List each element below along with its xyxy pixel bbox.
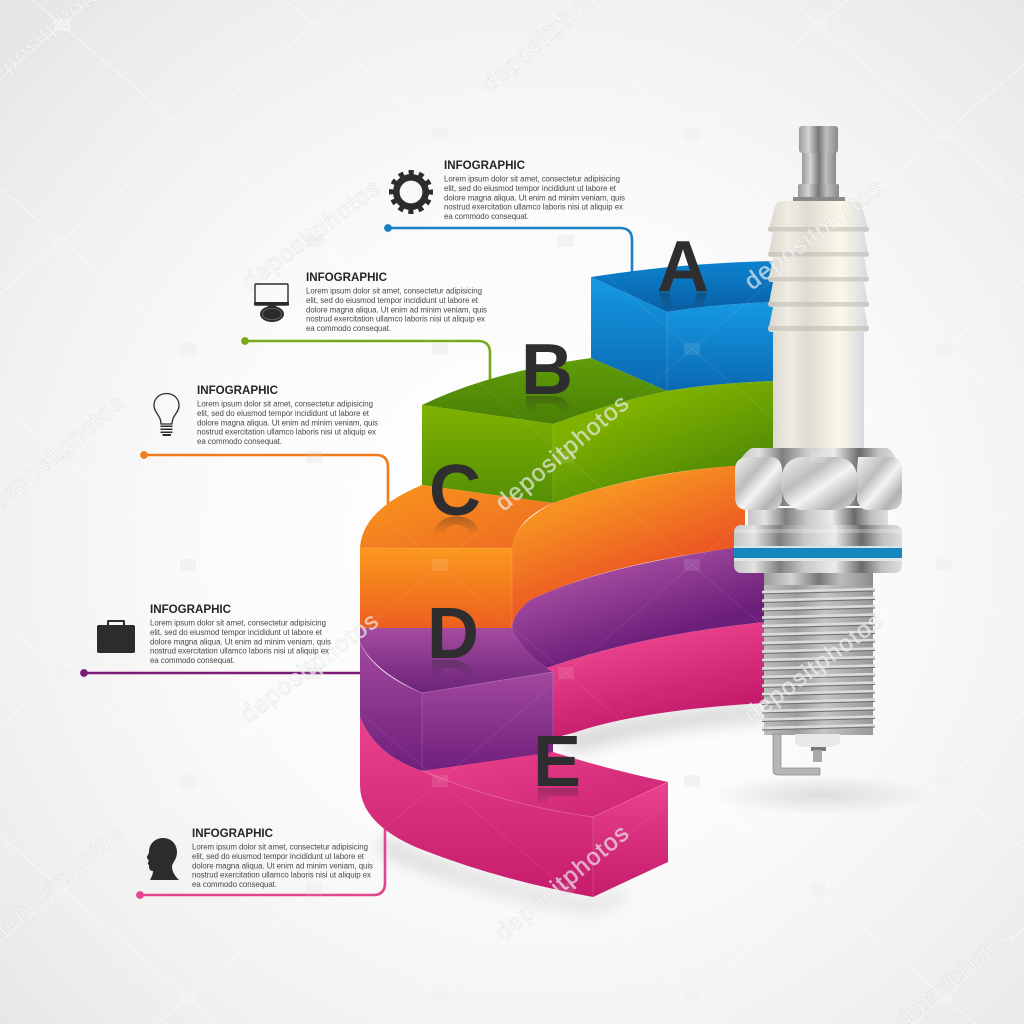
step D purple block: [360, 544, 765, 771]
icon: monitor: [254, 284, 289, 322]
block edge highlights: [360, 312, 668, 897]
text block D: nostrud exercitation ullamco laboris nisi ut aliquip ex: [150, 647, 329, 656]
text block E: INFOGRAPHIC: [192, 827, 274, 840]
plug hex nut and flange: [734, 448, 902, 573]
icon: gear: [392, 172, 430, 212]
letter A: A: [657, 227, 709, 307]
watermark overlay: depositphotos: [237, 175, 385, 295]
text block B: INFOGRAPHIC: [306, 271, 388, 284]
icon: person head: [147, 838, 179, 880]
text block A: dolore magna aliqua. Ut enim ad minim veniam, quis: [444, 193, 625, 202]
text block B: ea commodo consequat.: [306, 324, 391, 333]
text block B: elit, sed do eiusmod tempor incididunt ut labore et: [306, 296, 479, 305]
text block A: nostrud exercitation ullamco laboris nisi ut aliquip ex: [444, 203, 623, 212]
spark plug: [734, 126, 902, 775]
text block B: Lorem ipsum dolor sit amet, consectetur adipisicing: [306, 286, 482, 296]
text block C: [197, 384, 378, 446]
text block C: Lorem ipsum dolor sit amet, consectetur adipisicing: [197, 400, 373, 408]
connector line E: [137, 825, 385, 898]
letter D: [427, 594, 479, 724]
connector line B: [242, 338, 490, 382]
ground shadow under spark plug: [710, 775, 930, 815]
step A blue block: [591, 261, 775, 391]
step E pink block: [360, 622, 765, 897]
text block E: Lorem ipsum dolor sit amet, consectetur adipisicing: [192, 842, 368, 852]
letter C: [429, 451, 481, 581]
watermark overlay: depositphotos: [739, 608, 887, 728]
text block D: [150, 603, 331, 665]
text block A: INFOGRAPHIC: [444, 159, 526, 172]
text block C: ea commodo consequat.: [197, 437, 282, 446]
icon: light bulb: [154, 394, 179, 436]
letter B: B: [521, 330, 573, 410]
letter D: D: [427, 644, 479, 724]
icon: briefcase: [97, 620, 135, 653]
text block C: nostrud exercitation ullamco laboris nisi ut aliquip ex: [197, 428, 376, 437]
plug terminal: [793, 126, 845, 201]
text block C: elit, sed do eiusmod tempor incididunt ut labore et: [197, 409, 370, 418]
letter B: B: [521, 380, 573, 460]
text block A: ea commodo consequat.: [444, 212, 529, 221]
connector line C: [141, 452, 388, 506]
text block C: INFOGRAPHIC: [197, 384, 279, 397]
text block B: dolore magna aliqua. Ut enim ad minim veniam, quis: [306, 305, 487, 314]
text block B: nostrud exercitation ullamco laboris nisi ut aliquip ex: [306, 315, 485, 324]
text block E: dolore magna aliqua. Ut enim ad minim veniam, quis: [192, 861, 373, 870]
text block A: elit, sed do eiusmod tempor incididunt ut labore et: [444, 184, 617, 193]
letter C: C: [429, 451, 481, 531]
text block D: ea commodo consequat.: [150, 656, 235, 665]
letter D: D: [427, 594, 479, 674]
text block E: [192, 827, 373, 889]
letter C: C: [429, 501, 481, 581]
watermark overlay: depositphotos: [490, 820, 634, 947]
text block A: [444, 159, 625, 221]
ground shadows under the ribbon: [380, 706, 765, 910]
letter E: E: [533, 722, 581, 802]
text block B: [306, 271, 487, 333]
letter E: E: [533, 772, 581, 852]
watermark overlay: depositphotos: [490, 390, 634, 517]
text block D: dolore magna aliqua. Ut enim ad minim veniam, quis: [150, 637, 331, 646]
letter B: [521, 330, 573, 460]
letter A: [657, 227, 709, 357]
text block C: dolore magna aliqua. Ut enim ad minim veniam, quis: [197, 418, 378, 427]
connector line A: [385, 225, 632, 272]
connector line D: [81, 670, 362, 676]
letter A: A: [657, 277, 709, 357]
text block D: Lorem ipsum dolor sit amet, consectetur adipisicing: [150, 618, 326, 628]
watermark overlay: depositphotos: [739, 175, 887, 295]
plug electrodes: [773, 734, 840, 775]
text block A: Lorem ipsum dolor sit amet, consectetur adipisicing: [444, 174, 620, 184]
letter E: [533, 722, 581, 852]
step C orange block: [360, 465, 745, 628]
text block D: elit, sed do eiusmod tempor incididunt ut labore et: [150, 628, 323, 637]
text block E: ea commodo consequat.: [192, 880, 277, 889]
text block E: elit, sed do eiusmod tempor incididunt ut labore et: [192, 852, 365, 861]
step B green block: [422, 358, 775, 503]
text block D: INFOGRAPHIC: [150, 603, 232, 616]
text block E: nostrud exercitation ullamco laboris nisi ut aliquip ex: [192, 871, 371, 880]
plug threaded body: [762, 572, 875, 735]
watermark overlay: depositphotos: [235, 608, 383, 728]
plug insulator: [768, 201, 869, 451]
